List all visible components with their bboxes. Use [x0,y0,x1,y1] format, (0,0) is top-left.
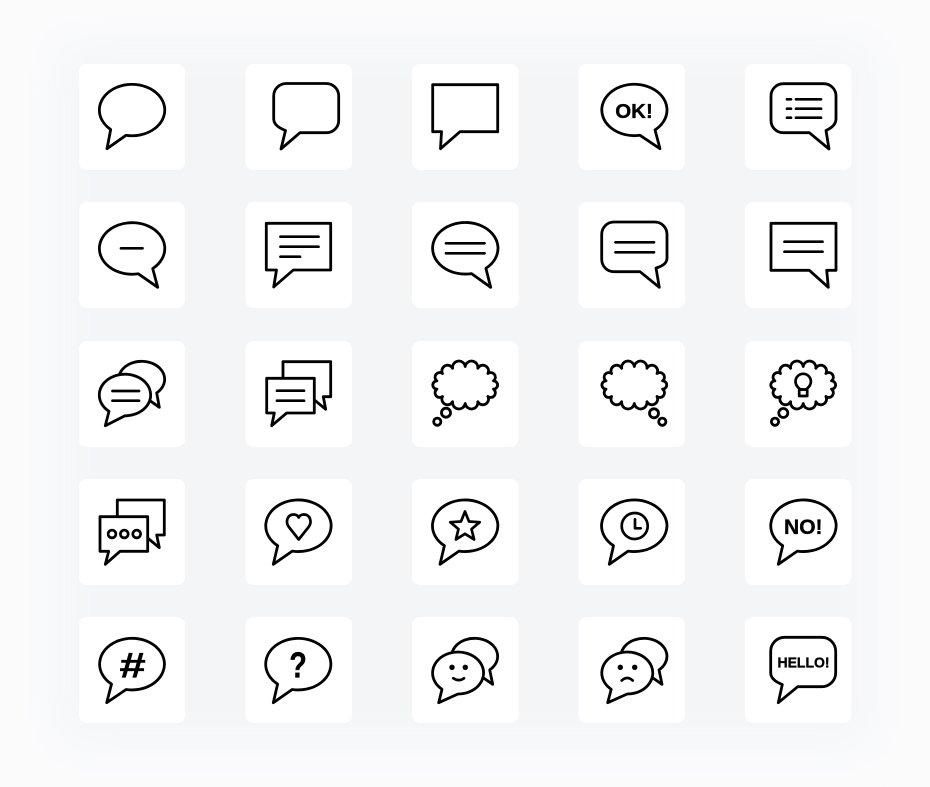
icon card: rounded bubble with two lines [578,202,685,308]
icon card: oval bubble with two lines [412,202,518,308]
icon card: square bubble with two lines [745,202,852,308]
icon card: oval bubble with clock [578,479,685,585]
icon card: NO bubble [745,479,852,585]
icon card: HELLO bubble: HELLO! [778,655,830,672]
icon card: thought cloud with light bulb [745,341,852,447]
icon card: smiling double bubble [412,617,518,723]
icon card: oval bubble with heart [246,479,352,585]
icon card: OK speech bubble [578,64,685,170]
icon card: oval bubble with star [412,479,518,585]
icon card: hashtag bubble: # [120,646,146,685]
icon card: two oval bubbles [79,341,185,447]
icon card: NO bubble: NO! [784,516,823,539]
icon card: oval speech bubble [79,64,185,170]
icon card: square double bubble with three dots [79,479,185,585]
icon card: HELLO bubble [745,617,852,723]
icon card: square speech bubble [412,64,518,170]
icon card: thought cloud, left trail [412,341,518,447]
icon card: rounded speech bubble [246,64,352,170]
icon card: hashtag bubble [79,617,185,723]
icon card: list speech bubble [745,64,852,170]
icon card: oval bubble with minus [79,202,185,308]
icon card: frowning double bubble [578,617,685,723]
icon card: OK speech bubble: OK! [615,100,653,123]
icon card: square bubble with text lines [246,202,352,308]
icon card: question mark bubble [246,617,352,723]
icon card: question mark bubble: ? [289,644,307,685]
icon card: thought cloud, right trail [578,341,685,447]
icon card: two square bubbles [246,341,352,447]
